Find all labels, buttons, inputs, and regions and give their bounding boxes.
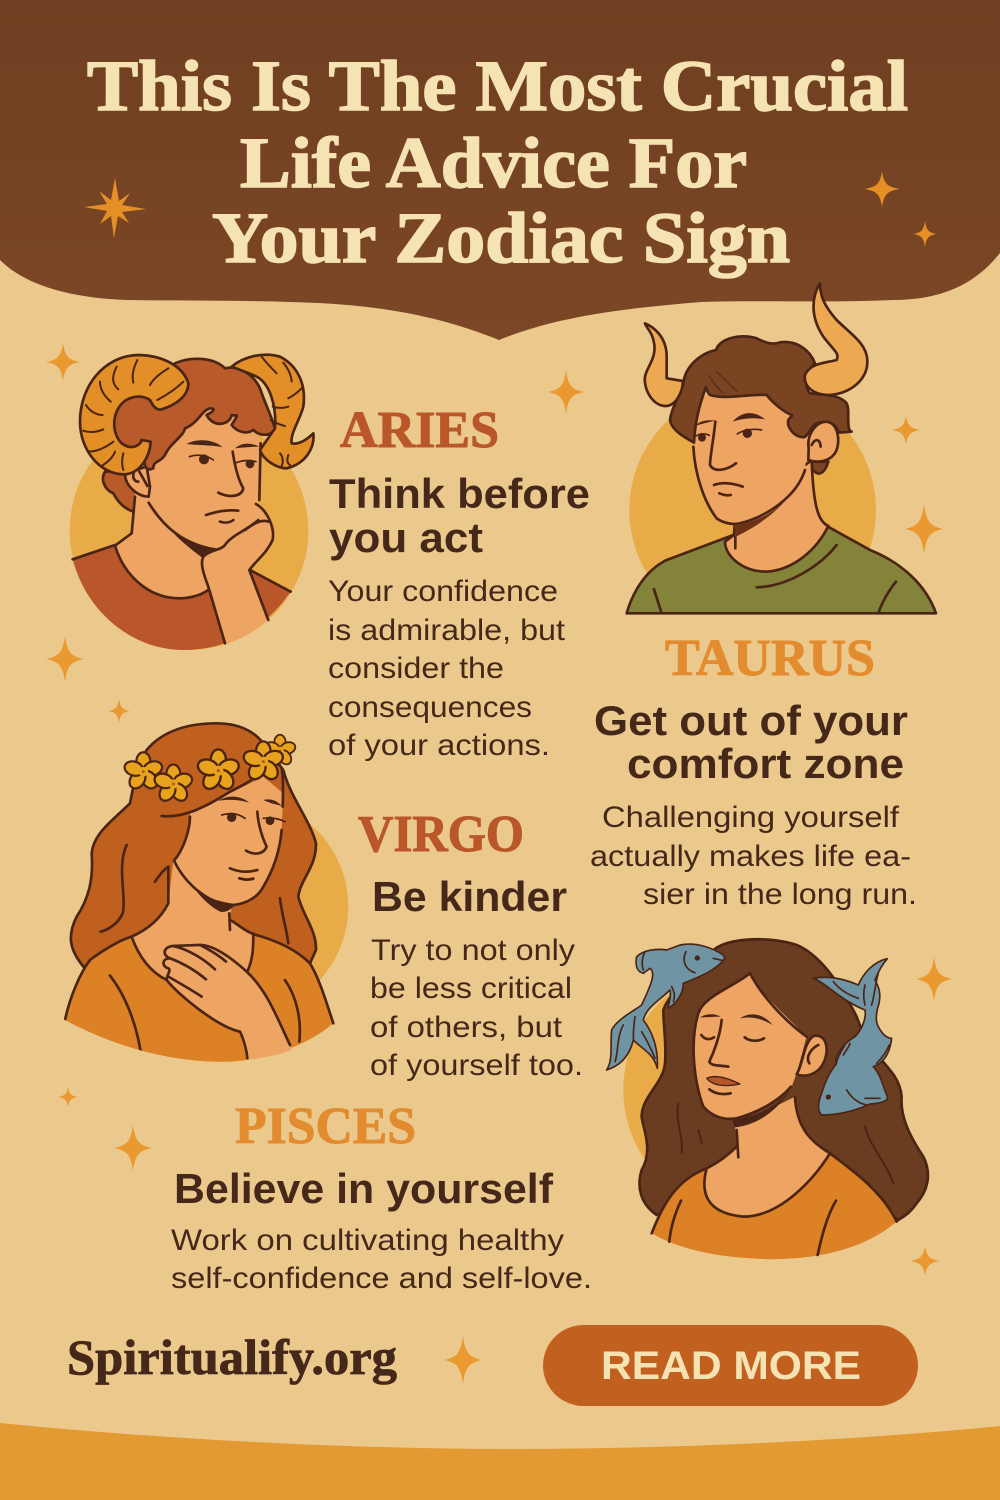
body copy — [328, 575, 566, 762]
title: Your Zodiac Sign — [212, 198, 790, 278]
subheading: Believe in yourself — [174, 1165, 554, 1212]
right horn — [232, 355, 314, 468]
ear — [808, 422, 838, 461]
title — [87, 46, 908, 278]
neck — [725, 460, 828, 572]
illustration: Aries — [70, 355, 314, 650]
body copy: be less critical — [370, 972, 572, 1005]
long hair — [71, 723, 316, 967]
body copy — [370, 934, 583, 1082]
icon: header star small — [914, 221, 936, 247]
subheading: Be kinder — [372, 873, 567, 920]
fish left — [607, 944, 725, 1070]
back hair — [103, 470, 147, 512]
decorative stars — [46, 343, 952, 1384]
face — [173, 777, 283, 905]
button: read more — [543, 1325, 918, 1406]
body copy: of yourself too. — [370, 1049, 583, 1082]
jaw shadow — [196, 891, 234, 912]
illustration: Taurus — [627, 283, 936, 633]
text: Virgo — [358, 806, 583, 1082]
left horn — [645, 323, 683, 406]
ear — [797, 1036, 827, 1076]
body copy: self-confidence and self-love. — [171, 1262, 592, 1295]
body copy: Challenging yourself — [602, 801, 900, 834]
subheading: comfort zone — [627, 740, 904, 787]
subheading — [329, 470, 590, 561]
icon: burst star — [84, 178, 146, 238]
body copy: consider the — [328, 652, 504, 685]
illustration: Virgo — [65, 723, 348, 1063]
body copy: actually makes life ea- — [590, 840, 911, 873]
neck — [115, 430, 273, 643]
jaw shadow — [167, 525, 218, 557]
text: Aries — [328, 402, 590, 762]
jaw shadow — [734, 490, 793, 537]
body copy: sier in the long run. — [643, 878, 917, 911]
brand name: Spiritualify.org — [67, 1329, 397, 1385]
jaw shadow — [732, 1090, 790, 1127]
body copy: consequences — [328, 691, 532, 724]
ear — [125, 467, 150, 497]
button: read more: READ MORE — [601, 1344, 861, 1388]
hand — [256, 990, 292, 1059]
face — [694, 973, 807, 1119]
nose and mouth — [206, 452, 243, 523]
long hair — [640, 939, 928, 1220]
heading: TAURUS — [665, 630, 875, 687]
dress — [65, 933, 333, 1063]
subheading: Think before — [329, 470, 590, 517]
body copy — [171, 1224, 592, 1295]
features — [695, 413, 765, 426]
neck — [704, 1097, 830, 1217]
neck and chest — [134, 862, 265, 1060]
hand — [202, 504, 273, 643]
top — [652, 1153, 897, 1259]
icon: header star right — [864, 172, 900, 206]
body copy: Try to not only — [371, 934, 575, 967]
body copy: of others, but — [370, 1011, 563, 1044]
face — [693, 387, 810, 524]
text: Pisces — [171, 1098, 592, 1295]
subheading — [594, 697, 908, 787]
subheading: you act — [329, 514, 483, 561]
subheading: Get out of your — [594, 697, 908, 744]
title: Life Advice For — [240, 123, 747, 203]
heading: PISCES — [235, 1098, 416, 1155]
body copy: Your confidence — [328, 575, 558, 608]
footer band — [0, 1423, 1000, 1500]
title: This Is The Most Crucial — [87, 46, 908, 126]
body copy: of your actions. — [328, 729, 550, 762]
fish right — [813, 959, 892, 1115]
right horn — [805, 283, 867, 395]
hair over forehead — [137, 737, 260, 816]
main hair — [108, 359, 275, 469]
face — [130, 403, 261, 551]
mouth — [707, 1077, 740, 1086]
heading: VIRGO — [358, 806, 524, 863]
shirt — [73, 544, 291, 650]
left horn — [80, 355, 188, 474]
back hair — [810, 462, 828, 474]
heading: ARIES — [340, 402, 499, 459]
header banner — [0, 0, 1000, 340]
body copy: Work on cultivating healthy — [171, 1224, 564, 1257]
shirt — [627, 526, 936, 613]
features — [218, 797, 282, 806]
flower crown — [123, 735, 297, 804]
eyes and brows — [187, 440, 259, 448]
hair — [670, 336, 852, 443]
features — [700, 1014, 773, 1025]
text: Taurus — [590, 630, 917, 911]
body copy: is admirable, but — [328, 614, 566, 647]
illustration: Pisces — [607, 939, 928, 1259]
body copy — [590, 801, 917, 911]
